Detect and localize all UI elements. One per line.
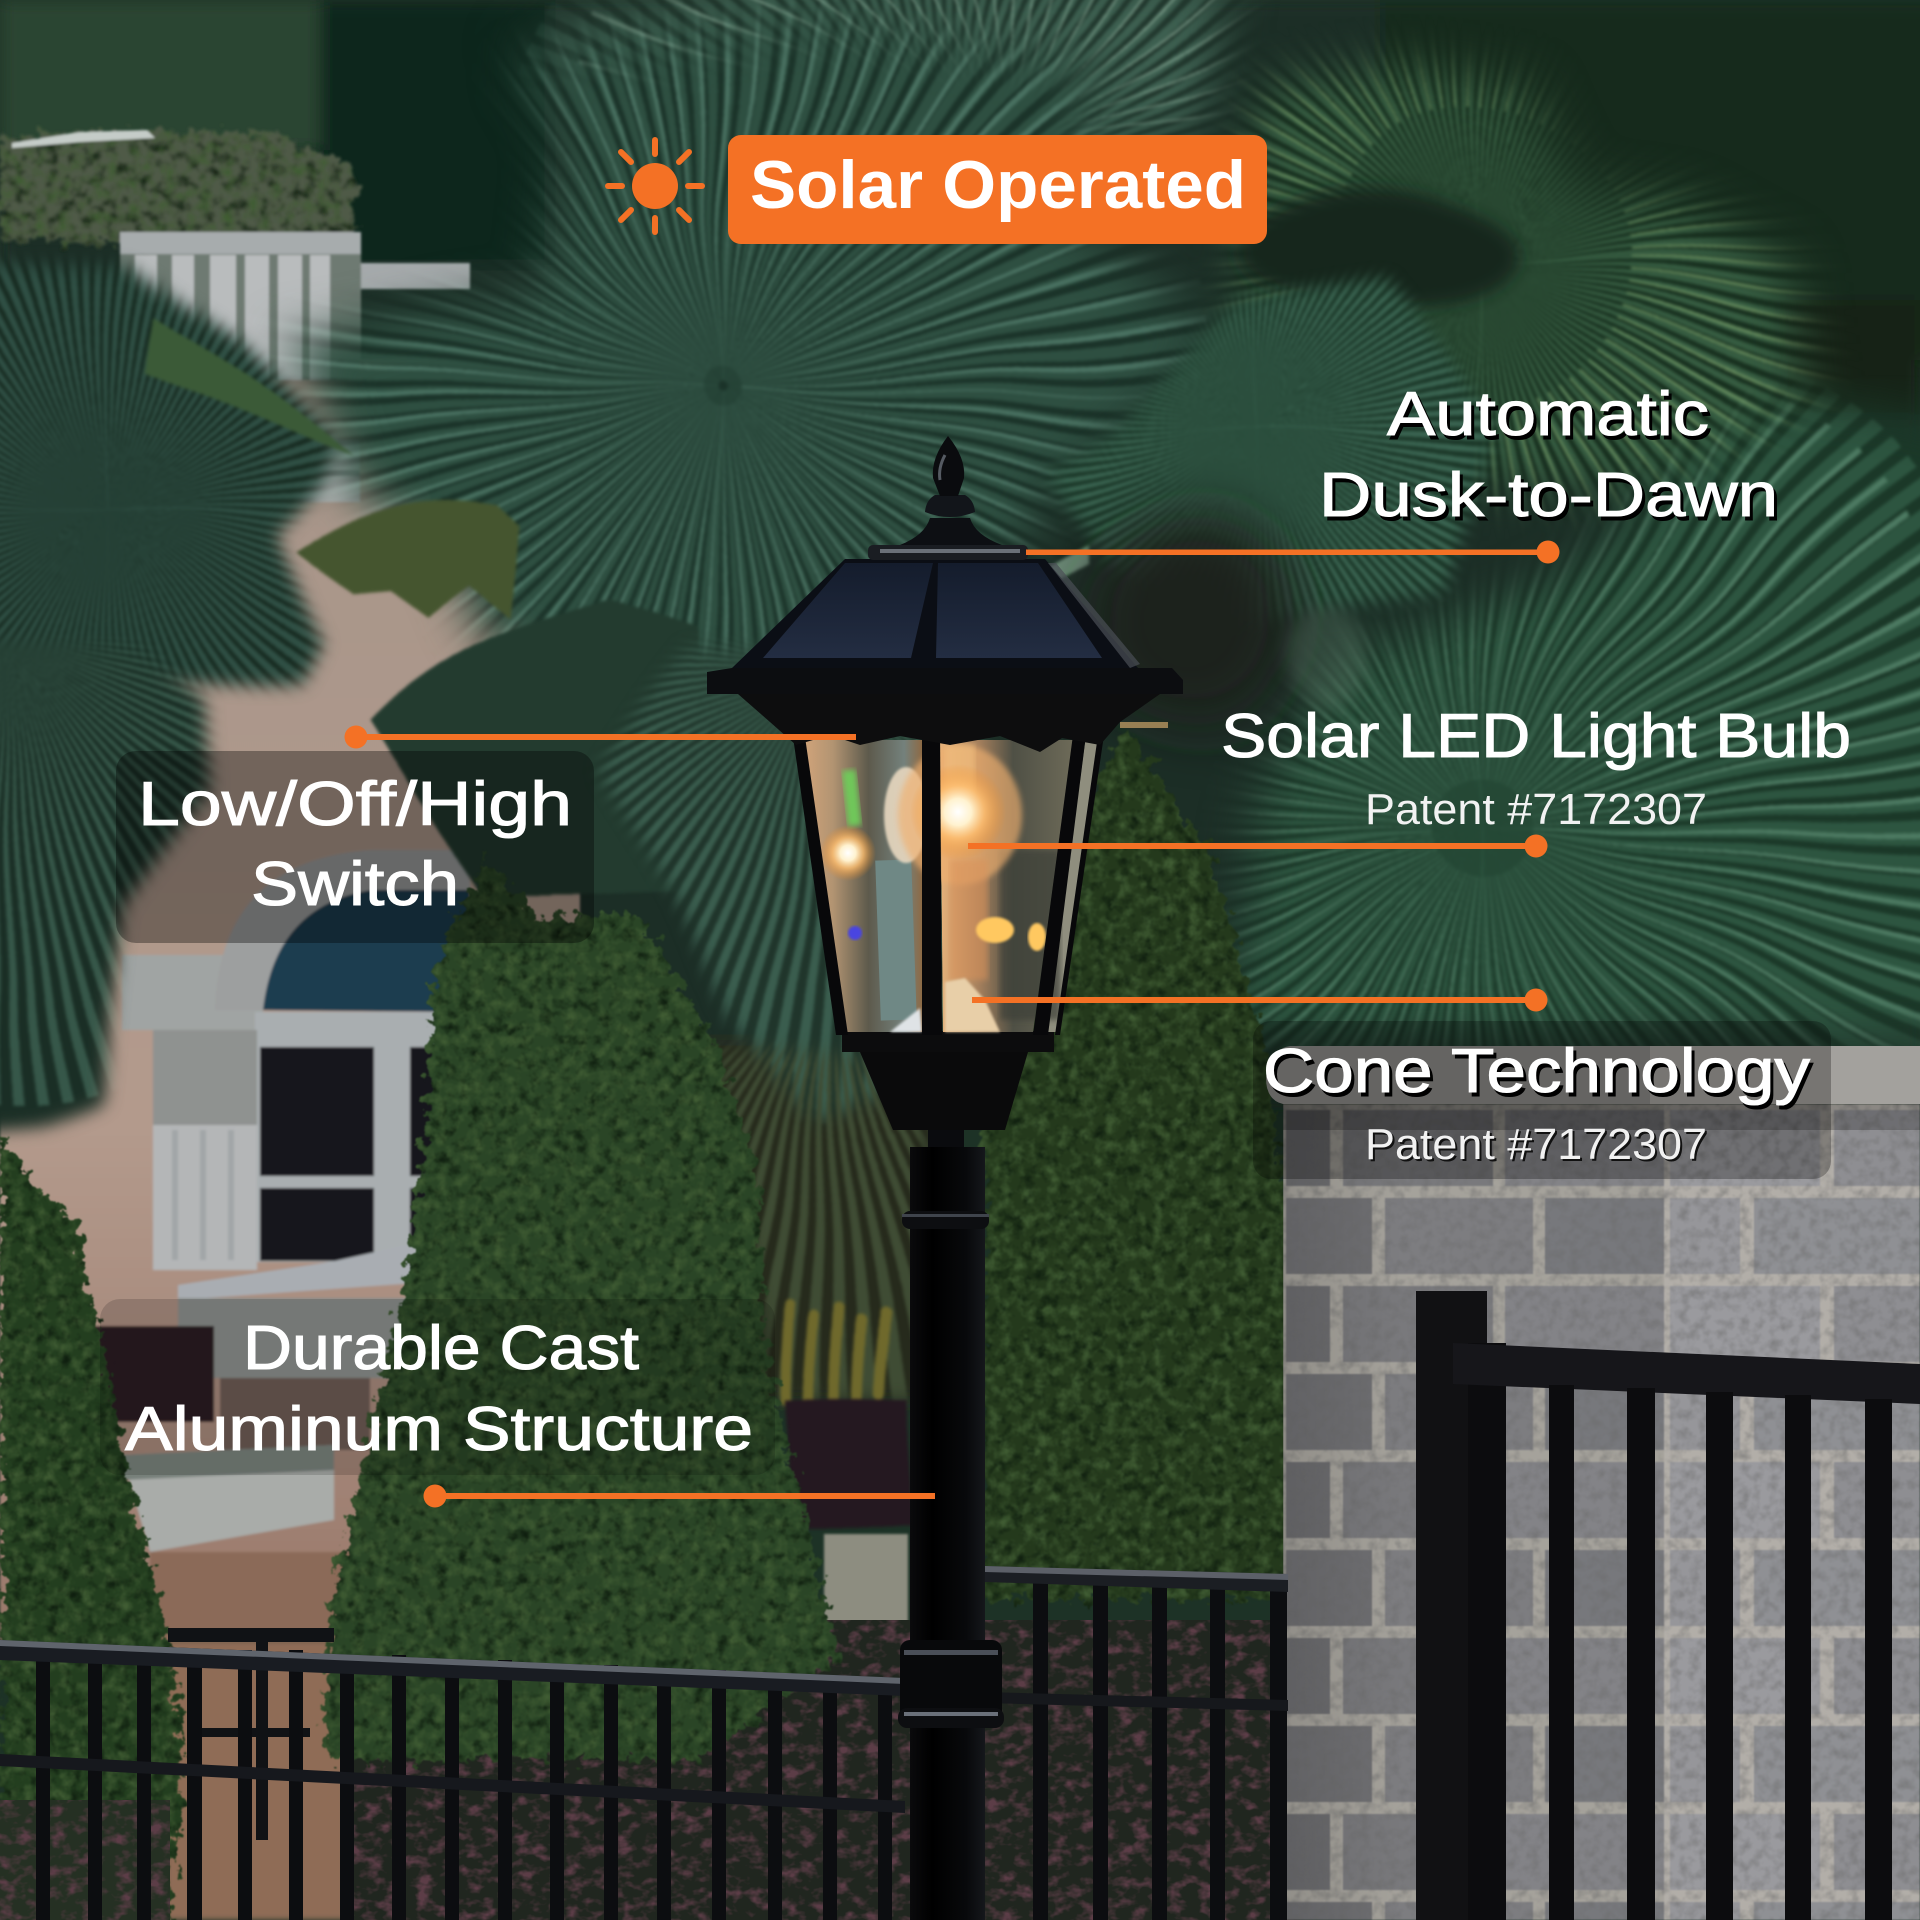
front fence right (985, 1566, 1288, 1920)
pillar cap (1266, 1046, 1920, 1104)
lantern hood (738, 694, 1160, 752)
heading: Dusk-to-Dawn (1319, 461, 1778, 530)
leader line (344, 726, 856, 748)
solar panel roof (732, 559, 1140, 668)
leader line (968, 834, 1548, 858)
dark tree backdrop (0, 0, 1920, 1400)
callout: Solar LED Light Bulb (968, 702, 1851, 858)
olive frond (290, 495, 520, 620)
patent number: Patent #7172307 (1365, 1120, 1707, 1169)
icon: sun (608, 140, 702, 232)
main palm fan (262, 2, 1210, 656)
palm fronds (0, 0, 1920, 1530)
callout panel: Low/Off/High Switch (116, 751, 594, 943)
reflector cone (945, 978, 1000, 1032)
leader line (424, 1484, 935, 1508)
badge: Solar Operated (728, 135, 1267, 244)
left palm fan (0, 240, 380, 720)
brick pillar (1266, 1046, 1920, 1920)
building (0, 130, 908, 1642)
upper right palm fan (1214, 43, 1836, 517)
heading: Switch (251, 850, 459, 919)
bulb glow (820, 745, 1046, 980)
middle teal fan (1020, 260, 1530, 660)
heading: Cone Technology (1263, 1037, 1810, 1106)
callout panel: Cone Technology (1253, 1021, 1831, 1179)
solar lamp post (707, 436, 1183, 1920)
heading: Durable Cast (243, 1314, 639, 1383)
callout: Cone Technology (972, 988, 1810, 1169)
right hedge bush (980, 729, 1292, 1600)
heading (125, 1314, 753, 1464)
patent number: Patent #7172307 (1365, 785, 1707, 834)
heading: Low/Off/High (138, 770, 572, 839)
heading: Solar LED Light Bulb (1221, 702, 1851, 771)
front fence left (0, 1640, 905, 1920)
heading (138, 770, 572, 919)
arched window (122, 955, 263, 1030)
iron gate (1416, 1291, 1920, 1920)
callout: Low/Off/High Switch (138, 726, 856, 919)
badge: Solar Operated: Solar Operated (750, 147, 1246, 223)
callout panel: Durable Cast Aluminum Structure (100, 1299, 775, 1475)
rear fence left (168, 1628, 334, 1840)
callout: Durable Cast Aluminum Structure (125, 1314, 935, 1508)
lantern base (860, 1052, 1028, 1130)
dark sweeping frond (367, 600, 720, 900)
center hedge bush (324, 857, 839, 1760)
lantern cap and finial (868, 436, 1028, 560)
heading: Automatic (1387, 380, 1709, 449)
right palm fan (1180, 380, 1920, 1120)
plants below fence (340, 1620, 1300, 1920)
leader line (972, 988, 1548, 1012)
heading: Aluminum Structure (125, 1395, 753, 1464)
eave (707, 668, 1183, 694)
lantern frame bars (792, 730, 1104, 1035)
left hedge bush (0, 1130, 185, 1920)
heading (1319, 380, 1778, 530)
post (898, 1120, 1004, 1920)
hanging olive fronds (722, 1044, 928, 1400)
lower palm fan (597, 640, 988, 1124)
callout: Automatic Dusk-to-Dawn (1026, 380, 1778, 564)
glass panes (803, 740, 1100, 1032)
top palm fan (526, 0, 1250, 135)
leader line (1026, 540, 1560, 564)
